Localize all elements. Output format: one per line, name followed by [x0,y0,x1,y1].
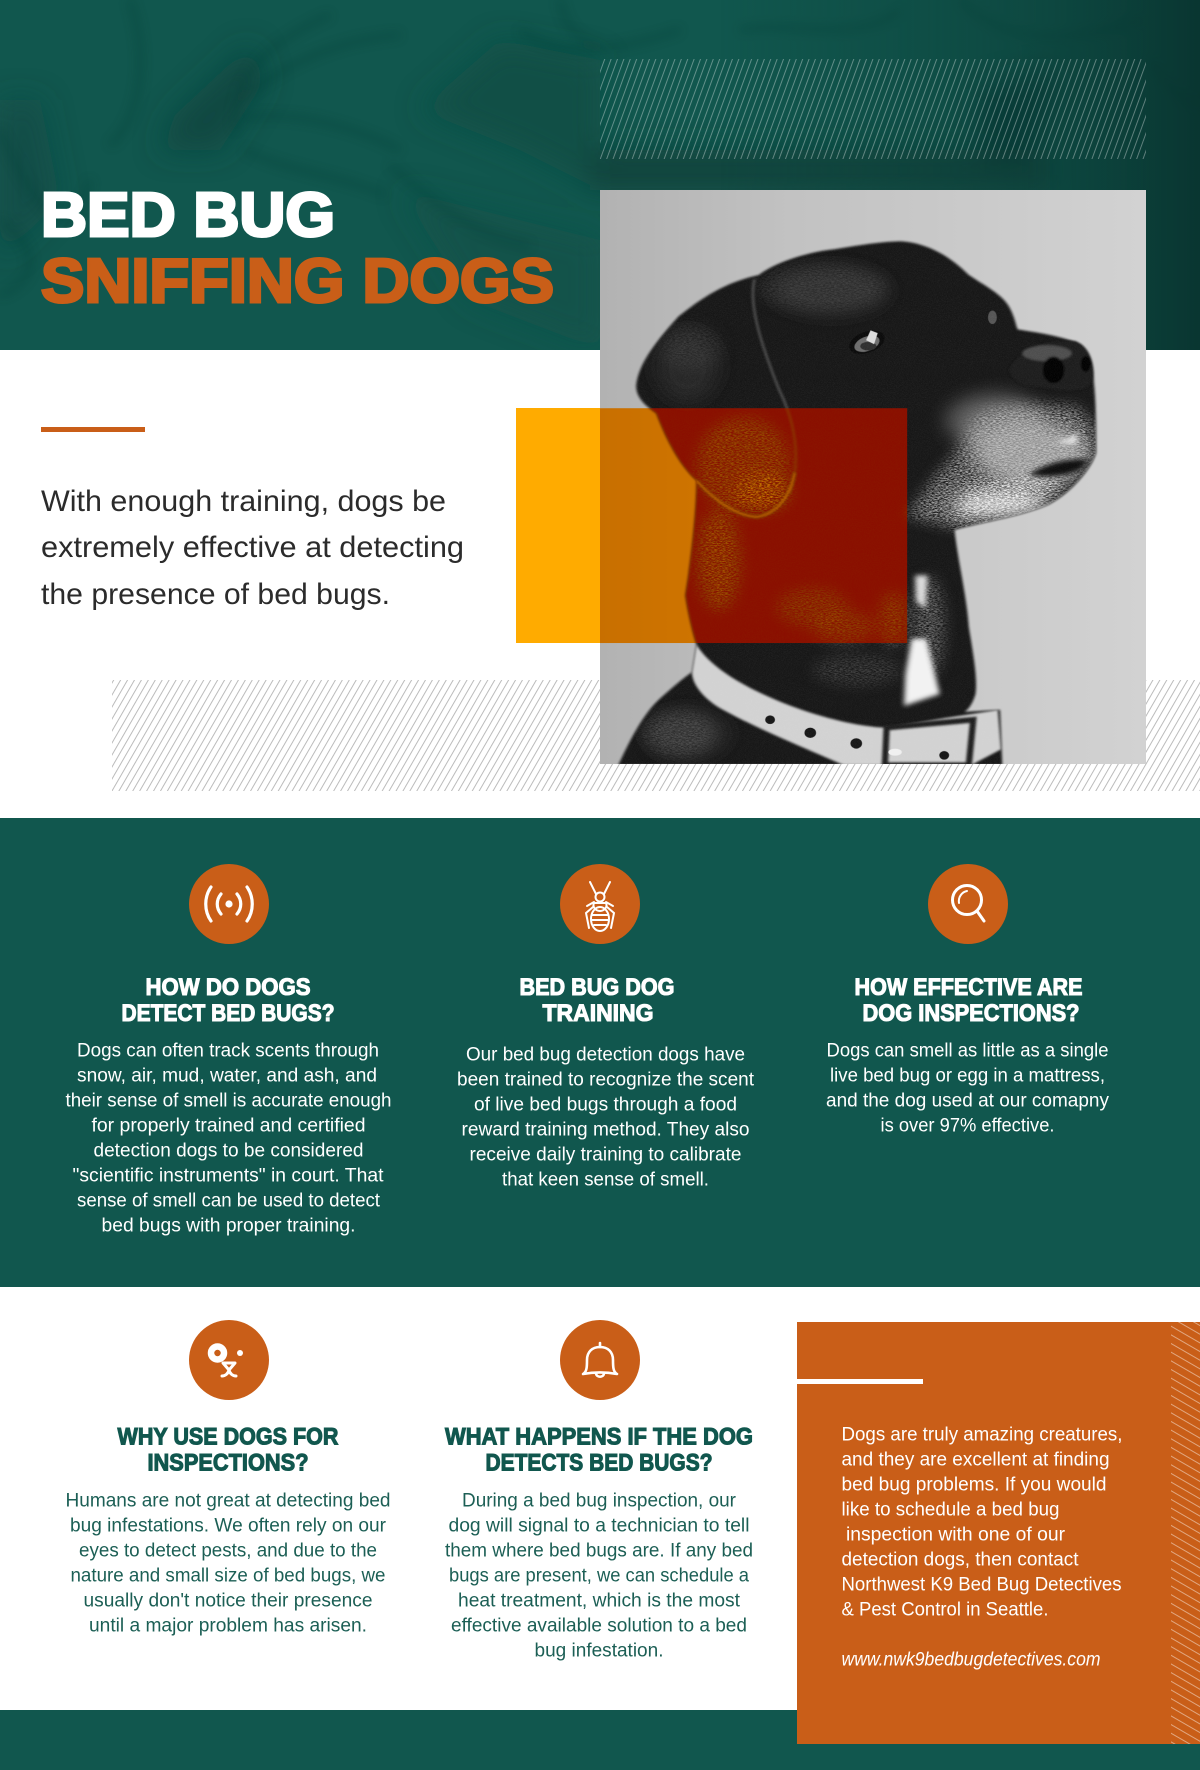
body text: bugs are present, we can schedule a [449,1566,749,1586]
icon: dog face [189,1320,269,1400]
title: BED BUG [41,181,335,250]
body text [66,1040,392,1236]
heading: DETECT BED BUGS? [122,1000,334,1027]
heading: TRAINING [542,1000,654,1027]
body text: receive daily training to calibrate [470,1144,742,1166]
icon: magnifying glass [928,864,1008,944]
title: SNIFFING DOGS [41,247,554,316]
hatch pattern: top stripe block [600,59,1146,159]
body text: effective available solution to a bed [451,1616,747,1636]
body text: sense of smell can be used to detect [77,1190,381,1212]
section: how effective are dog inspections [826,864,1109,1136]
heading: WHY USE DOGS FOR [118,1424,339,1450]
icon: bell [560,1320,640,1400]
body text: nature and small size of bed bugs, we [70,1566,386,1586]
body text [66,1490,390,1636]
heading: WHAT HAPPENS IF THE DOG [445,1424,753,1450]
body text: is over 97% effective. [880,1116,1054,1136]
body text: Dogs can smell as little as a single [826,1040,1108,1062]
panel: hero banner with bedding texture [0,0,1200,350]
heading [854,974,1082,1027]
heading [445,1424,753,1476]
call to action text: detection dogs, then contact [842,1550,1079,1570]
heading: DETECTS BED BUGS? [486,1450,712,1476]
body text [457,1044,755,1190]
body text: dog will signal to a technician to tell [448,1516,750,1536]
call to action text: like to schedule a bed bug [842,1500,1060,1520]
body text: them where bed bugs are. If any bed [445,1540,753,1562]
hatch pattern: lower stripe band [112,680,1200,791]
panel: call to action [797,1322,1200,1744]
divider accent: intro [41,427,145,432]
body text: snow, air, mud, water, and ash, and [77,1066,377,1086]
call to action text: Northwest K9 Bed Bug Detectives [842,1574,1122,1596]
section: how do dogs detect bed bugs [66,864,392,1236]
intro text: With enough training, dogs be [41,485,446,518]
body text: Our bed bug detection dogs have [466,1044,745,1066]
photo: black dog in a white collar [600,190,1146,764]
speckled fur [643,263,1096,757]
body text: and the dog used at our comapny [826,1090,1109,1112]
body text: "scientific instruments" in court. That [72,1166,384,1186]
icon: scent signal waves [189,864,269,944]
intro text: the presence of bed bugs. [41,578,390,611]
footer band [0,1710,1200,1770]
body text: their sense of smell is accurate enough [66,1090,392,1112]
intro text: extremely effective at detecting [41,531,464,564]
call to action text: & Pest Control in Seattle. [842,1600,1048,1620]
section: bed bug dog training [457,864,755,1190]
body text: Humans are not great at detecting bed [66,1490,390,1512]
heading [122,974,334,1027]
body text: live bed bug or egg in a mattress, [830,1066,1105,1086]
body text [826,1040,1109,1136]
heading: INSPECTIONS? [148,1450,308,1476]
soft shading on the head [647,267,1089,757]
body text: bug infestation. [534,1640,664,1662]
title [41,181,554,316]
orange overlay on the photo [600,408,907,643]
heading: HOW DO DOGS [146,974,310,1001]
body text: eyes to detect pests, and due to the [79,1540,377,1562]
heading: HOW EFFECTIVE ARE [854,974,1082,1001]
call to action text: bed bug problems. If you would [842,1474,1106,1496]
call to action text: and they are excellent at finding [842,1450,1110,1470]
call to action text: Dogs are truly amazing creatures, [842,1424,1122,1446]
body text: for properly trained and certified [92,1116,366,1136]
icon: bed bug [560,864,640,944]
section: what happens if the dog detects bed bugs [445,1320,753,1662]
heading: DOG INSPECTIONS? [862,1000,1080,1027]
nose and eyes [845,311,1092,391]
heading: BED BUG DOG [520,974,674,1001]
yellow accent block [516,408,600,643]
body text: been trained to recognize the scent [457,1070,755,1090]
panel: teal info band [0,818,1200,1287]
body text [445,1490,753,1662]
heading [520,974,674,1027]
intro text [41,485,464,611]
body text: until a major problem has arisen. [89,1616,367,1636]
body text: bug infestations. We often rely on our [70,1516,387,1536]
body text: of live bed bugs through a food [474,1094,737,1116]
body text: usually don't notice their presence [84,1590,372,1612]
collar and buckle [692,645,1001,765]
body text: that keen sense of smell. [502,1170,709,1190]
body text: detection dogs to be considered [94,1140,364,1162]
call to action text: www.nwk9bedbugdetectives.com [842,1650,1100,1670]
body text: bed bugs with proper training. [102,1216,356,1236]
body text: Dogs can often track scents through [77,1040,379,1062]
body text: reward training method. They also [462,1120,750,1140]
call to action text: inspection with one of our [846,1524,1066,1546]
heading [118,1424,339,1476]
body text: During a bed bug inspection, our [462,1490,737,1512]
body text: heat treatment, which is the most [458,1590,741,1612]
section: why use dogs for inspections [66,1320,390,1636]
call to action text [842,1424,1122,1670]
